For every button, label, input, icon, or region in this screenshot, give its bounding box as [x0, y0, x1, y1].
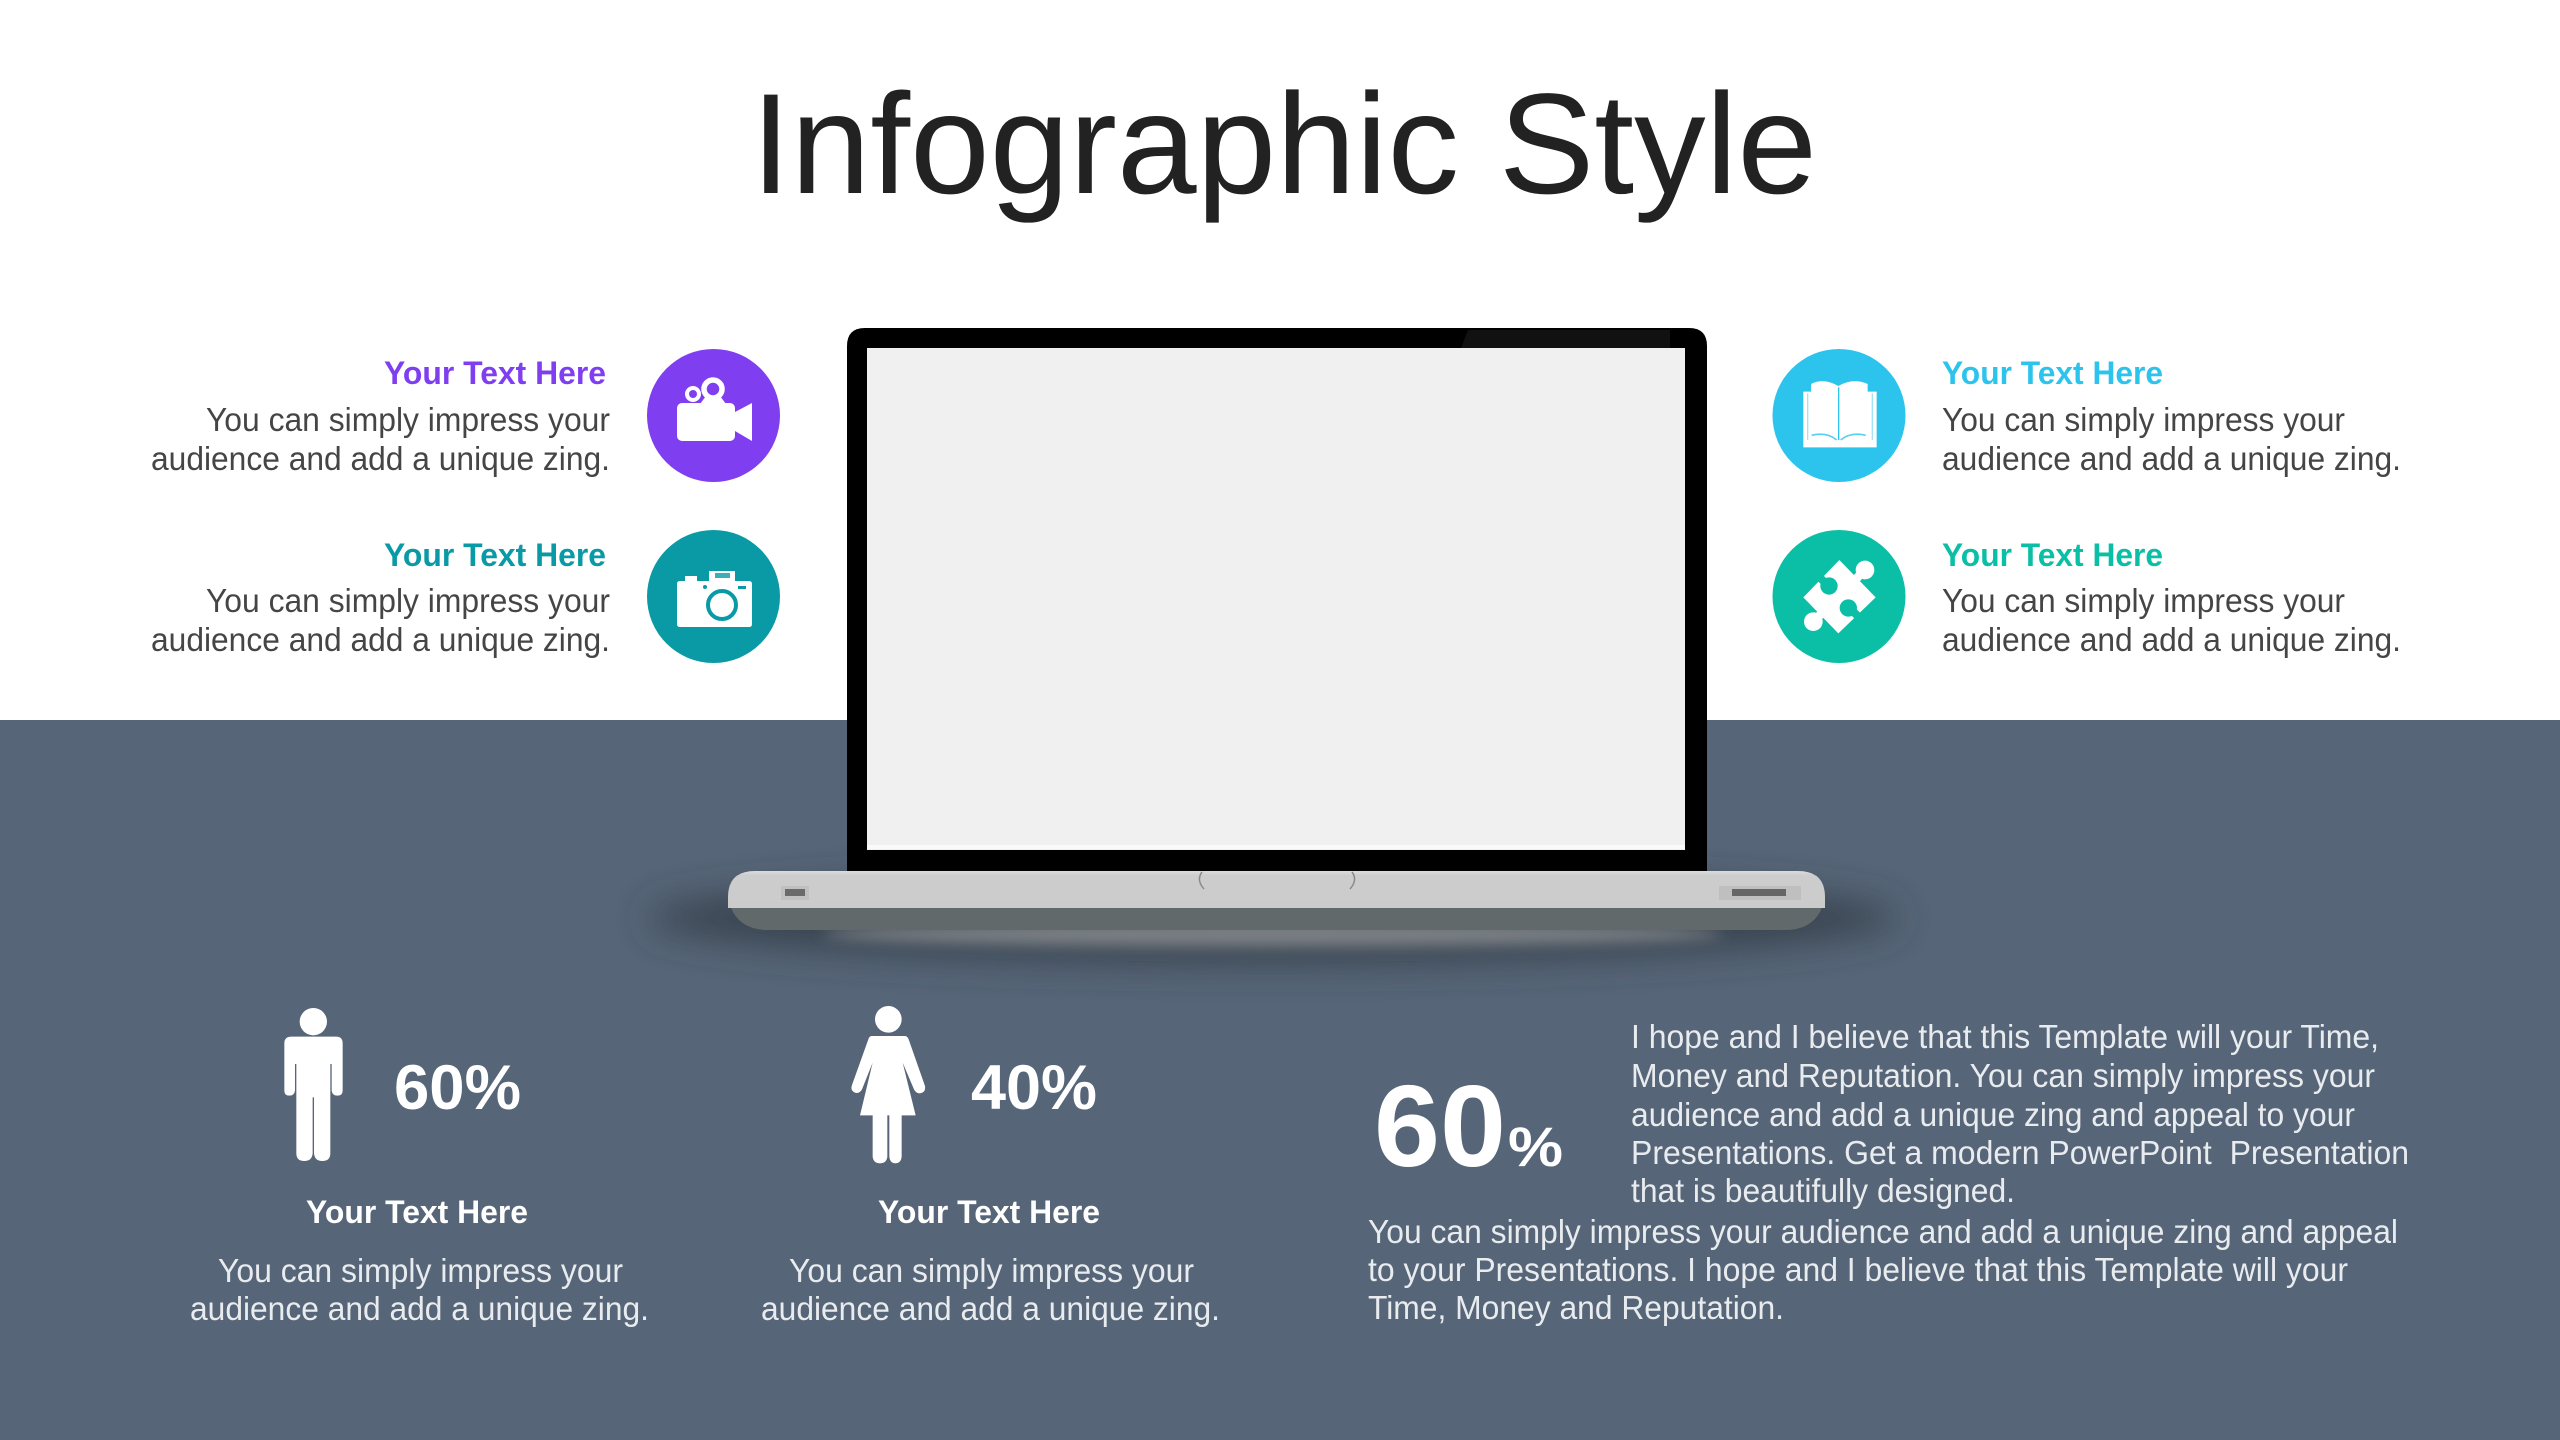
description: You can simply impress your: [206, 582, 610, 619]
description: audience and add a unique zing.: [190, 1290, 649, 1327]
heading: Your Text Here: [878, 1194, 1100, 1230]
icon: man: [284, 1008, 343, 1161]
paragraph one: that is beautifully designed.: [1631, 1172, 2015, 1209]
laptop illustration: [648, 328, 1898, 962]
icon: woman: [851, 1006, 925, 1163]
icon: open book: [1772, 349, 1906, 482]
heading: Your Text Here: [306, 1194, 528, 1230]
laptop shadow: [648, 874, 1898, 962]
right port: [1719, 886, 1801, 900]
stat: women 40%: [761, 1006, 1220, 1327]
left port: [781, 886, 809, 900]
description: [761, 1252, 1220, 1327]
description: You can simply impress your: [218, 1252, 623, 1289]
description: audience and add a unique zing.: [151, 621, 610, 658]
paragraph one: Presentations. Get a modern PowerPoint Presentation: [1631, 1134, 2409, 1171]
icon: video camera: [647, 349, 780, 482]
laptop lid bezel: [847, 328, 1707, 872]
description: audience and add a unique zing.: [1942, 440, 2401, 477]
paragraph one: [1631, 1018, 2409, 1209]
lid glare: [1461, 330, 1670, 348]
icon: photo camera: [647, 530, 780, 663]
percentage: 60%: [394, 1053, 521, 1123]
paragraph one: I hope and I believe that this Template will your Time,: [1631, 1018, 2379, 1055]
paragraph two: You can simply impress your audience and add a unique zing and appeal: [1368, 1213, 2398, 1250]
icon: puzzle piece: [1772, 530, 1906, 663]
description: You can simply impress your: [1942, 582, 2345, 619]
description: You can simply impress your: [789, 1252, 1194, 1289]
heading: Your Text Here: [1942, 355, 2163, 391]
description: [1942, 401, 2401, 477]
large percentage: 60: [1374, 1061, 1506, 1191]
laptop screen: [867, 348, 1685, 850]
description: [190, 1252, 649, 1327]
heading: Your Text Here: [384, 537, 606, 573]
description: [151, 401, 610, 477]
description: audience and add a unique zing.: [151, 440, 610, 477]
stat: men 60%: [190, 1008, 649, 1327]
laptop base underside: [730, 905, 1823, 930]
stat: 60% summary: [1368, 1018, 2409, 1326]
paragraph one: Money and Reputation. You can simply impress your: [1631, 1057, 2375, 1094]
description: [1942, 582, 2401, 658]
description: You can simply impress your: [1942, 401, 2345, 438]
dark lower background panel: [0, 720, 2560, 1440]
trackpad notch: [1199, 872, 1355, 889]
paragraph two: to your Presentations. I hope and I believe that this Template will your: [1368, 1251, 2348, 1288]
paragraph two: [1368, 1213, 2398, 1326]
laptop reflection: [823, 921, 1723, 947]
large percentage: [1374, 1061, 1563, 1191]
heading: Your Text Here: [1942, 537, 2163, 573]
paragraph one: audience and add a unique zing and appeal to your: [1631, 1096, 2355, 1133]
laptop base top: [728, 871, 1825, 908]
feature: green puzzle: [1772, 530, 2401, 663]
description: audience and add a unique zing.: [761, 1290, 1220, 1327]
percentage: 40%: [971, 1053, 1097, 1123]
description: You can simply impress your: [206, 401, 610, 438]
description: [151, 582, 610, 658]
title: Infographic Style: [751, 65, 1817, 224]
large percentage: %: [1508, 1115, 1563, 1178]
feature: cyan book: [1772, 349, 2401, 482]
feature: teal camera: [151, 530, 780, 663]
heading: Your Text Here: [384, 355, 606, 391]
paragraph two: Time, Money and Reputation.: [1368, 1289, 1784, 1326]
feature: purple video: [151, 349, 780, 482]
description: audience and add a unique zing.: [1942, 621, 2401, 658]
